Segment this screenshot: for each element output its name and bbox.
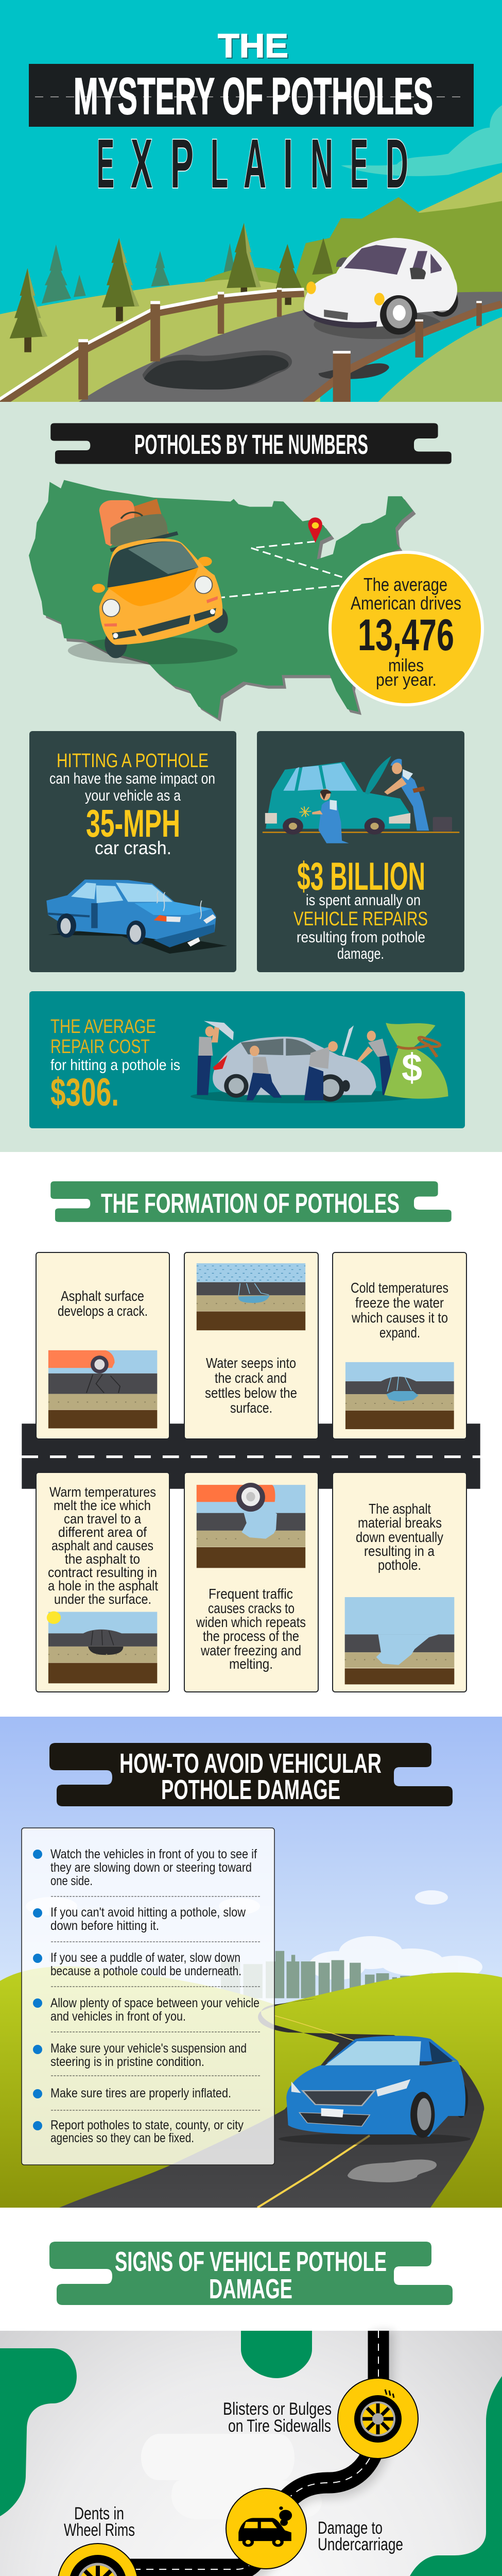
step card: pothole: down eventually: [356, 1529, 443, 1545]
green shapes: [0, 2331, 502, 2576]
step card: water: surface.: [230, 1400, 272, 1416]
panel: 3 billion repairs: $3 BILLION: [297, 855, 425, 899]
soft white shapes: [0, 2434, 383, 2576]
step card: melt: [36, 1472, 169, 1692]
callout: average miles circle: American drives: [351, 592, 461, 614]
hero section background: [0, 0, 502, 402]
step card: traffic: widen which repeats: [196, 1614, 306, 1630]
tip 3: If you see a puddle of water, slow down: [50, 1951, 240, 1965]
step card: crack: Asphalt surface: [61, 1288, 144, 1304]
right fence rail: [306, 301, 502, 403]
hills: [0, 1967, 502, 2208]
step card: water: Water seeps into: [206, 1355, 296, 1371]
panel: 35-mph crash: your vehicle as a: [85, 787, 181, 804]
step card: traffic: melting.: [229, 1656, 273, 1672]
step card: freeze: freeze the water: [355, 1295, 444, 1311]
road centre line: [257, 2136, 370, 2208]
title word EXPLAINED: X: [131, 125, 152, 202]
step card: traffic: causes cracks to: [208, 1600, 295, 1616]
left fence: [0, 288, 304, 405]
luggage: [99, 499, 178, 550]
panel: 3 billion repairs: damage.: [337, 945, 384, 962]
tip 4: Allow plenty of space between your vehicle: [50, 1996, 259, 2010]
map of the USA with car: [29, 480, 416, 722]
heading banner: signs of damage: [49, 2242, 453, 2305]
panel: 35-mph crash: HITTING A POTHOLE: [57, 750, 209, 772]
step card: melt: asphalt and causes: [51, 1538, 153, 1553]
panel: 3 billion repairs: VEHICLE REPAIRS: [293, 908, 428, 930]
step card: freeze: expand.: [379, 1325, 420, 1341]
panel: average repair cost: REPAIR COST: [50, 1036, 150, 1058]
tip 3: because a pothole could be underneath.: [50, 1964, 241, 1978]
step card: crack: develops a crack.: [58, 1303, 148, 1319]
tip 7: agencies so they can be fixed.: [50, 2131, 194, 2145]
panel: 3 billion repairs: is spent annually on: [306, 892, 421, 909]
panel: 35-mph crash: [29, 731, 236, 972]
city skyline: [221, 1951, 410, 1998]
map: [29, 480, 413, 718]
olive pine trees: [10, 223, 333, 352]
title word EXPLAINED: L: [211, 125, 228, 202]
road behind the cards: [22, 1423, 480, 1489]
illustration: rain and seeping water: [197, 1263, 305, 1330]
icon: bulging tire: [338, 2378, 418, 2459]
illustration: finished pothole: [345, 1597, 454, 1684]
step card: pothole: The asphalt: [369, 1501, 431, 1517]
orange car: [92, 538, 228, 658]
step card: traffic: water freezing and: [200, 1642, 301, 1658]
sign 1: blisters: [223, 2378, 418, 2459]
tip 2: [33, 1905, 246, 1933]
panel: average repair cost: $306.: [50, 1071, 119, 1114]
sign 1: blisters: on Tire Sidewalls: [228, 2416, 331, 2436]
step card: melt: under the surface.: [54, 1591, 151, 1607]
heading banner: the formation of potholes: [50, 1181, 452, 1222]
route dashes: [221, 541, 344, 598]
step card: melt: different area of: [58, 1524, 147, 1540]
title word EXPLAINED: P: [170, 125, 194, 202]
illustration: crashed blue car: [46, 879, 227, 954]
icon: smoking car: [226, 2488, 306, 2569]
sign 3: wheel rims: [58, 2504, 138, 2576]
step card: melt: the asphalt to: [65, 1551, 140, 1567]
illustration: blue car: [279, 2036, 471, 2145]
step card: crack: [36, 1252, 169, 1439]
step card: traffic: the process of the: [203, 1628, 299, 1644]
panel: 35-mph crash: can have the same impact on: [49, 770, 215, 787]
small pothole: [319, 363, 389, 379]
panel: 3 billion repairs: [257, 731, 464, 972]
step card: pothole: pothole.: [378, 1557, 421, 1573]
illustration: mechanics and money bag: [191, 1021, 448, 1103]
step card: water: [184, 1252, 318, 1439]
panel: average repair cost: $: [402, 1046, 422, 1089]
title word THE: THE: [218, 27, 288, 64]
panel: 35-mph crash: car crash.: [95, 837, 171, 858]
step card: freeze: which causes it to: [351, 1310, 448, 1326]
large pothole: [143, 350, 292, 389]
road: [78, 292, 502, 402]
tip 2: down before hitting it.: [50, 1919, 159, 1933]
sign 2: undercarriage: Damage to: [318, 2518, 383, 2538]
title word EXPLAINED: I: [283, 125, 293, 202]
step card: water: settles below the: [205, 1385, 297, 1401]
winding road: [75, 2331, 378, 2576]
illustration: sun and sunken asphalt: [47, 1612, 157, 1683]
step card: pothole: material breaks: [358, 1515, 442, 1531]
step card: melt: can travel to a: [64, 1511, 142, 1527]
step card: melt: contract resulting in: [48, 1565, 157, 1580]
step card: pothole: [333, 1472, 466, 1692]
heading banner: how-to avoid: POTHOLE DAMAGE: [161, 1774, 340, 1805]
icon: map pin: [308, 517, 322, 543]
illustration: frozen water: [345, 1362, 454, 1429]
step card: traffic: Frequent traffic: [209, 1586, 293, 1602]
heading banner: potholes by the numbers: [50, 423, 452, 464]
callout: average miles circle: 13,476: [358, 611, 454, 660]
heading banner: how-to avoid: HOW-TO AVOID VEHICULAR: [119, 1748, 382, 1779]
title: D: [386, 125, 408, 202]
step card: melt: melt the ice which: [54, 1498, 151, 1513]
hero landscape illustration: [0, 105, 502, 405]
tip 1: they are slowing down or steering toward: [50, 1860, 252, 1875]
white car: [303, 238, 458, 339]
step card: water: the crack and: [215, 1370, 287, 1386]
panel: 35-mph crash: 35-MPH: [86, 802, 180, 845]
illustration: car tyre on widening crack: [197, 1483, 305, 1568]
clouds: [26, 1890, 482, 1980]
sign 3: wheel rims: Wheel Rims: [64, 2520, 135, 2540]
road shadow: [82, 2331, 384, 2576]
car shadow: [68, 637, 237, 664]
sign 2: undercarriage: Undercarriage: [318, 2535, 403, 2554]
sign 1: blisters: Blisters or Bulges: [223, 2399, 332, 2419]
tip 4: [33, 1996, 259, 2024]
heading banner: signs of damage: DAMAGE: [209, 2274, 292, 2304]
cloud: [341, 105, 502, 176]
section background: signs heading: [0, 2208, 502, 2331]
tip 1: one side.: [50, 1874, 93, 1888]
step card: traffic: [184, 1472, 318, 1692]
tip 4: and vehicles in front of you.: [50, 2009, 186, 2024]
light mountain: [416, 172, 502, 226]
title word EXPLAINED: E: [97, 125, 114, 202]
tip 7: Report potholes to state, county, or city: [50, 2118, 244, 2132]
step card: freeze: Cold temperatures: [351, 1280, 448, 1296]
tip 1: Watch the vehicles in front of you to see if: [50, 1847, 257, 1861]
icon: wheel: [58, 2544, 138, 2576]
tip 6: Make sure tires are properly inflated.: [50, 2086, 231, 2100]
callout: average miles circle: The average: [363, 574, 447, 595]
near hill: [378, 317, 502, 402]
dark mountain: [295, 197, 502, 300]
tip 7: [33, 2118, 244, 2145]
tip 1: [33, 1847, 257, 1888]
panel: average repair cost: [29, 991, 465, 1128]
title word EXPLAINED: E: [350, 125, 368, 202]
tip 3: [33, 1951, 241, 1978]
tip 2: If you can't avoid hitting a pothole, slow: [50, 1905, 246, 1920]
step card: melt: a hole in the asphalt: [48, 1578, 158, 1594]
tip 5: [33, 2041, 247, 2069]
step card: freeze: [333, 1252, 466, 1439]
tip 5: Make sure your vehicle's suspension and: [50, 2041, 247, 2056]
puddle: [348, 2160, 437, 2182]
section background: numbers: [0, 402, 502, 1152]
title: [29, 27, 474, 202]
illustration: mechanics with teal car: [263, 756, 459, 843]
section background: formation: [0, 1152, 502, 1717]
step card: pothole: resulting in a: [364, 1543, 435, 1559]
section background: sky: [0, 1717, 502, 2208]
callout: average miles circle: per year.: [376, 670, 437, 690]
sign 2: undercarriage: [226, 2488, 403, 2569]
far hill: [205, 267, 314, 294]
panel: average repair cost: for hitting a pothole is: [50, 1057, 180, 1074]
winding road: [59, 1998, 484, 2208]
sign 3: wheel rims: Dents in: [74, 2504, 124, 2523]
section background: signs grey: [0, 2331, 502, 2576]
title word EXPLAINED: A: [244, 125, 266, 202]
panel: 3 billion repairs: resulting from pothole: [297, 929, 425, 946]
panel: average repair cost: THE AVERAGE: [50, 1016, 156, 1038]
meadow: [0, 279, 320, 402]
illustration: cracked road: [48, 1350, 157, 1428]
teal trees: [42, 243, 237, 303]
tip 5: steering is in pristine condition.: [50, 2055, 204, 2069]
tips panel: [22, 1828, 274, 2165]
callout: average miles circle: [330, 552, 482, 705]
step card: melt: Warm temperatures: [49, 1484, 156, 1500]
heading banner: how-to avoid: [49, 1743, 453, 1806]
map shadow: [32, 483, 416, 722]
title word EXPLAINED: N: [310, 125, 333, 202]
callout: average miles circle: miles: [388, 656, 424, 675]
title word EXPLAINED: [97, 125, 408, 202]
